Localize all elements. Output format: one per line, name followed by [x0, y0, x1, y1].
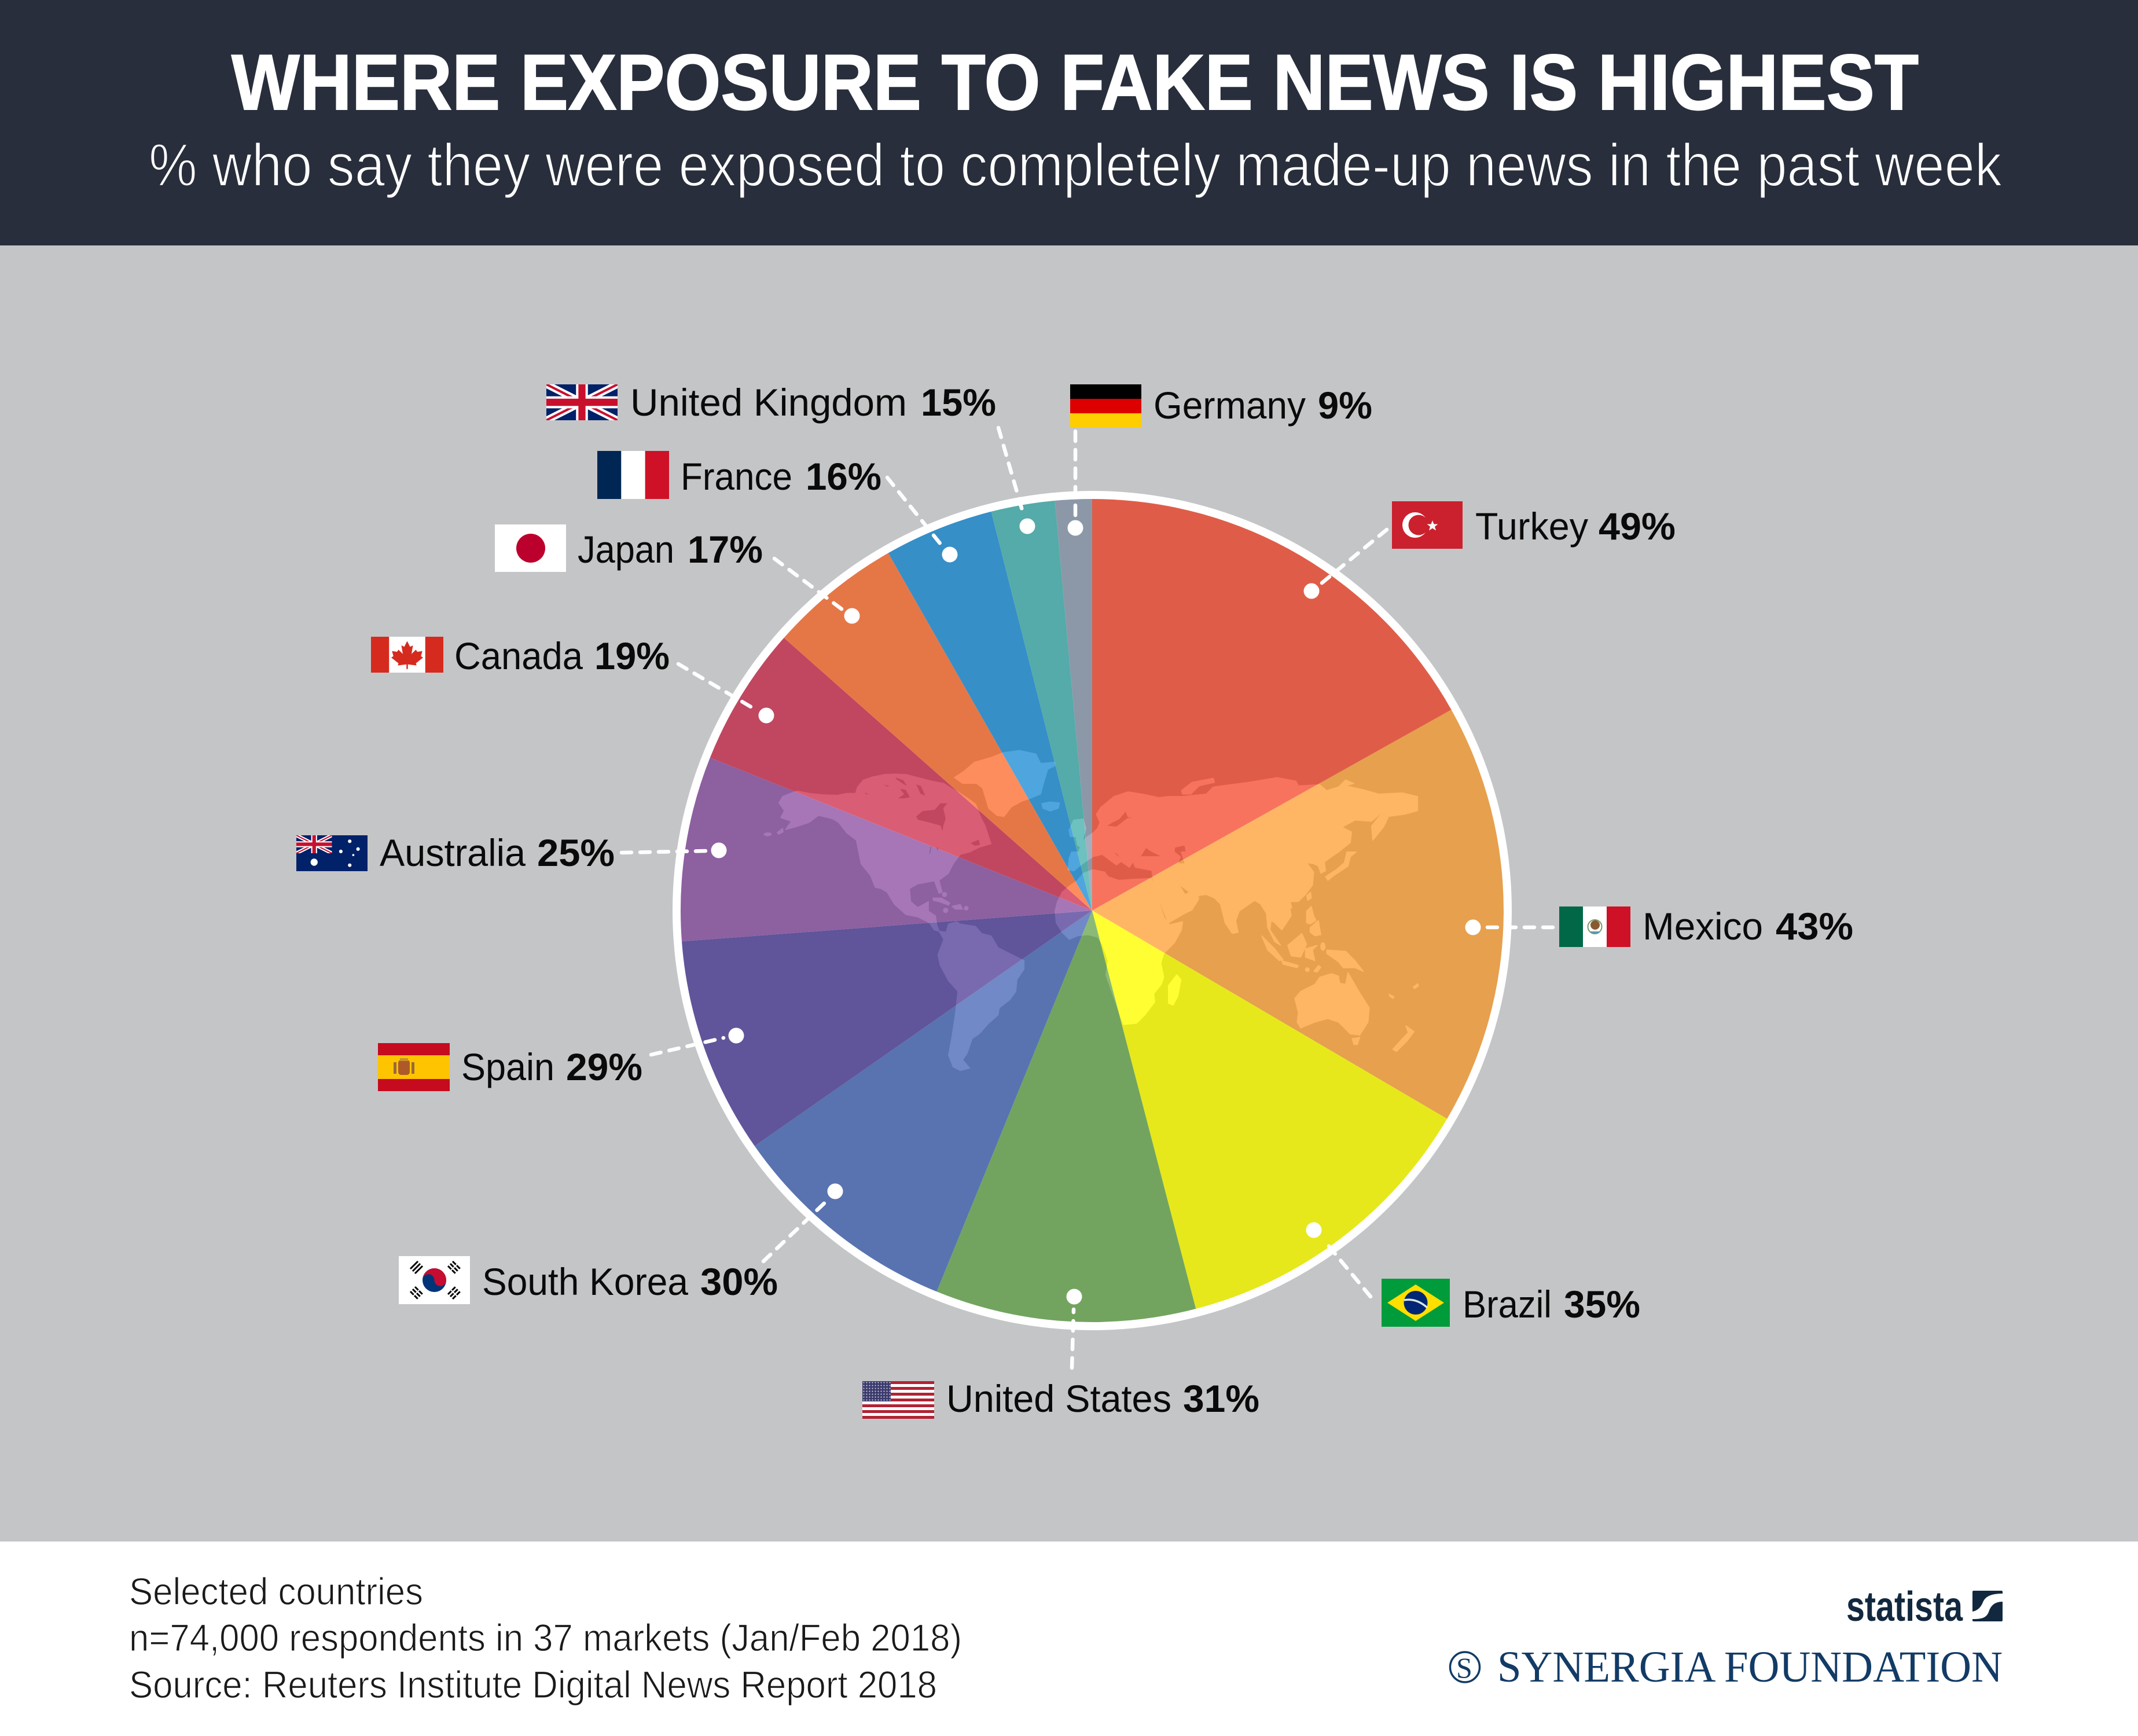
pie outer ring [673, 491, 1512, 1330]
leader: Mexico [1465, 919, 1553, 935]
leader: United States [1066, 1289, 1082, 1368]
flag: Spain [378, 1043, 450, 1091]
source notes: Source: Reuters Institute Digital News Report 2018 [129, 1663, 937, 1706]
label: Germany [1070, 384, 1372, 428]
leader: Germany [1067, 431, 1083, 536]
pie chart with world map [673, 491, 1512, 1330]
subtitle: % who say they were exposed to completely made-up news in the past week [149, 132, 2003, 199]
label: Spain [378, 1043, 642, 1091]
label: Australia [296, 831, 615, 874]
label: Spain: Spain [461, 1045, 554, 1088]
leader: South Korea [763, 1183, 843, 1261]
map: Afro-Eurasia and Oceania [1055, 777, 1419, 1052]
label: Brazil: Brazil [1463, 1283, 1552, 1326]
logo: Synergia Foundation: SYNERGIA FOUNDATION [1497, 1643, 2003, 1691]
slice: Germany [1055, 499, 1092, 911]
map: British Isles [1069, 819, 1086, 850]
label: United States: 31% [1183, 1377, 1259, 1420]
label: Germany: Germany [1154, 384, 1306, 427]
label: Spain: 29% [566, 1045, 642, 1088]
leader: United Kingdom [998, 428, 1035, 534]
map: Pacific islets [1389, 983, 1419, 999]
label: Canada: 19% [594, 634, 670, 677]
leader: Spain [651, 1028, 744, 1055]
label: Canada [371, 634, 670, 677]
map: New Guinea [1327, 950, 1364, 971]
map: Iceland [1042, 802, 1060, 811]
flag: France [597, 451, 669, 499]
map: Australia [1295, 972, 1369, 1035]
source notes: n=74,000 respondents in 37 markets (Jan/Feb 2018) [129, 1616, 962, 1659]
logo: statista: statista [1846, 1584, 1963, 1630]
slice: Australia [681, 758, 1092, 941]
map: Kamchatka [1372, 814, 1388, 840]
header band [0, 0, 2138, 245]
label: Mexico [1559, 905, 1853, 948]
flag: Turkey [1392, 501, 1463, 549]
slice: Brazil [1092, 911, 1447, 1309]
slice: Spain [682, 911, 1092, 1146]
slice: Turkey [1092, 499, 1452, 911]
label: Turkey [1392, 501, 1676, 549]
source notes [129, 1570, 962, 1706]
label: United States [862, 1377, 1259, 1420]
map: Caribbean islands [933, 893, 968, 912]
flag: United Kingdom [546, 384, 618, 420]
map: Eurasia [1068, 777, 1417, 945]
title: WHERE EXPOSURE TO FAKE NEWS IS HIGHEST [232, 38, 1919, 126]
label: Mexico: 43% [1776, 905, 1853, 948]
label: Germany: 9% [1318, 384, 1372, 427]
label: Japan: Japan [578, 528, 674, 571]
label: South Korea [399, 1256, 778, 1304]
slice: United States [936, 911, 1196, 1322]
flag: Canada [371, 637, 443, 673]
slice: South Korea [755, 911, 1092, 1291]
map: Madagascar [1169, 975, 1181, 1005]
flag: Germany [1070, 384, 1141, 428]
map: New Zealand [1393, 1026, 1414, 1052]
slice: Japan [784, 553, 1092, 911]
slice: France [888, 512, 1092, 911]
slice: Mexico [1092, 710, 1504, 1119]
leader: Brazil [1306, 1223, 1371, 1297]
footer panel [0, 1542, 2138, 1736]
flag: Mexico [1559, 906, 1630, 947]
flag: Australia [296, 835, 368, 871]
world map overlay [764, 750, 1419, 1070]
map: Southeast Asia islands [1262, 892, 1325, 972]
label: Japan: 17% [688, 528, 763, 571]
map: Japan and Korea [1318, 852, 1356, 880]
map: South America [938, 922, 1024, 1070]
label: Australia: 25% [537, 831, 615, 874]
label: Brazil: 35% [1564, 1283, 1640, 1326]
leader: France [887, 478, 957, 563]
map: Novaya Zemlya [1181, 778, 1214, 794]
label: Mexico: Mexico [1643, 905, 1763, 948]
label: Brazil [1382, 1279, 1640, 1327]
map: Africa [1055, 869, 1182, 1025]
flag: Brazil [1382, 1279, 1450, 1327]
map: Tasmania [1352, 1037, 1360, 1044]
label: France: France [681, 455, 792, 498]
logo: Synergia Foundation: S [1456, 1651, 1472, 1684]
label: United States: United States [946, 1377, 1171, 1420]
flag: United States [862, 1381, 934, 1419]
leader: Turkey [1303, 530, 1387, 599]
label: United Kingdom [546, 381, 996, 424]
label: South Korea: 30% [700, 1260, 778, 1303]
label: Australia: Australia [380, 831, 526, 874]
slice: Canada [710, 638, 1092, 911]
label: France [597, 451, 881, 499]
label: United Kingdom: United Kingdom [630, 381, 907, 424]
leader: Australia [622, 843, 727, 858]
label: United Kingdom: 15% [921, 381, 996, 424]
leader: Canada [678, 664, 774, 724]
label: France: 16% [806, 455, 881, 498]
flag: Japan [495, 524, 566, 572]
source notes: Selected countries [129, 1570, 423, 1613]
leader: Japan [774, 559, 860, 624]
label: Canada: Canada [454, 634, 583, 677]
label: Turkey: Turkey [1475, 505, 1588, 548]
flag: South Korea [399, 1256, 470, 1304]
label: South Korea: South Korea [482, 1260, 688, 1303]
slice: United Kingdom [991, 501, 1092, 911]
label: Turkey: 49% [1599, 505, 1676, 548]
map: Greenland [954, 750, 1055, 817]
map: Americas [764, 750, 1086, 1070]
label: Japan [495, 524, 763, 572]
